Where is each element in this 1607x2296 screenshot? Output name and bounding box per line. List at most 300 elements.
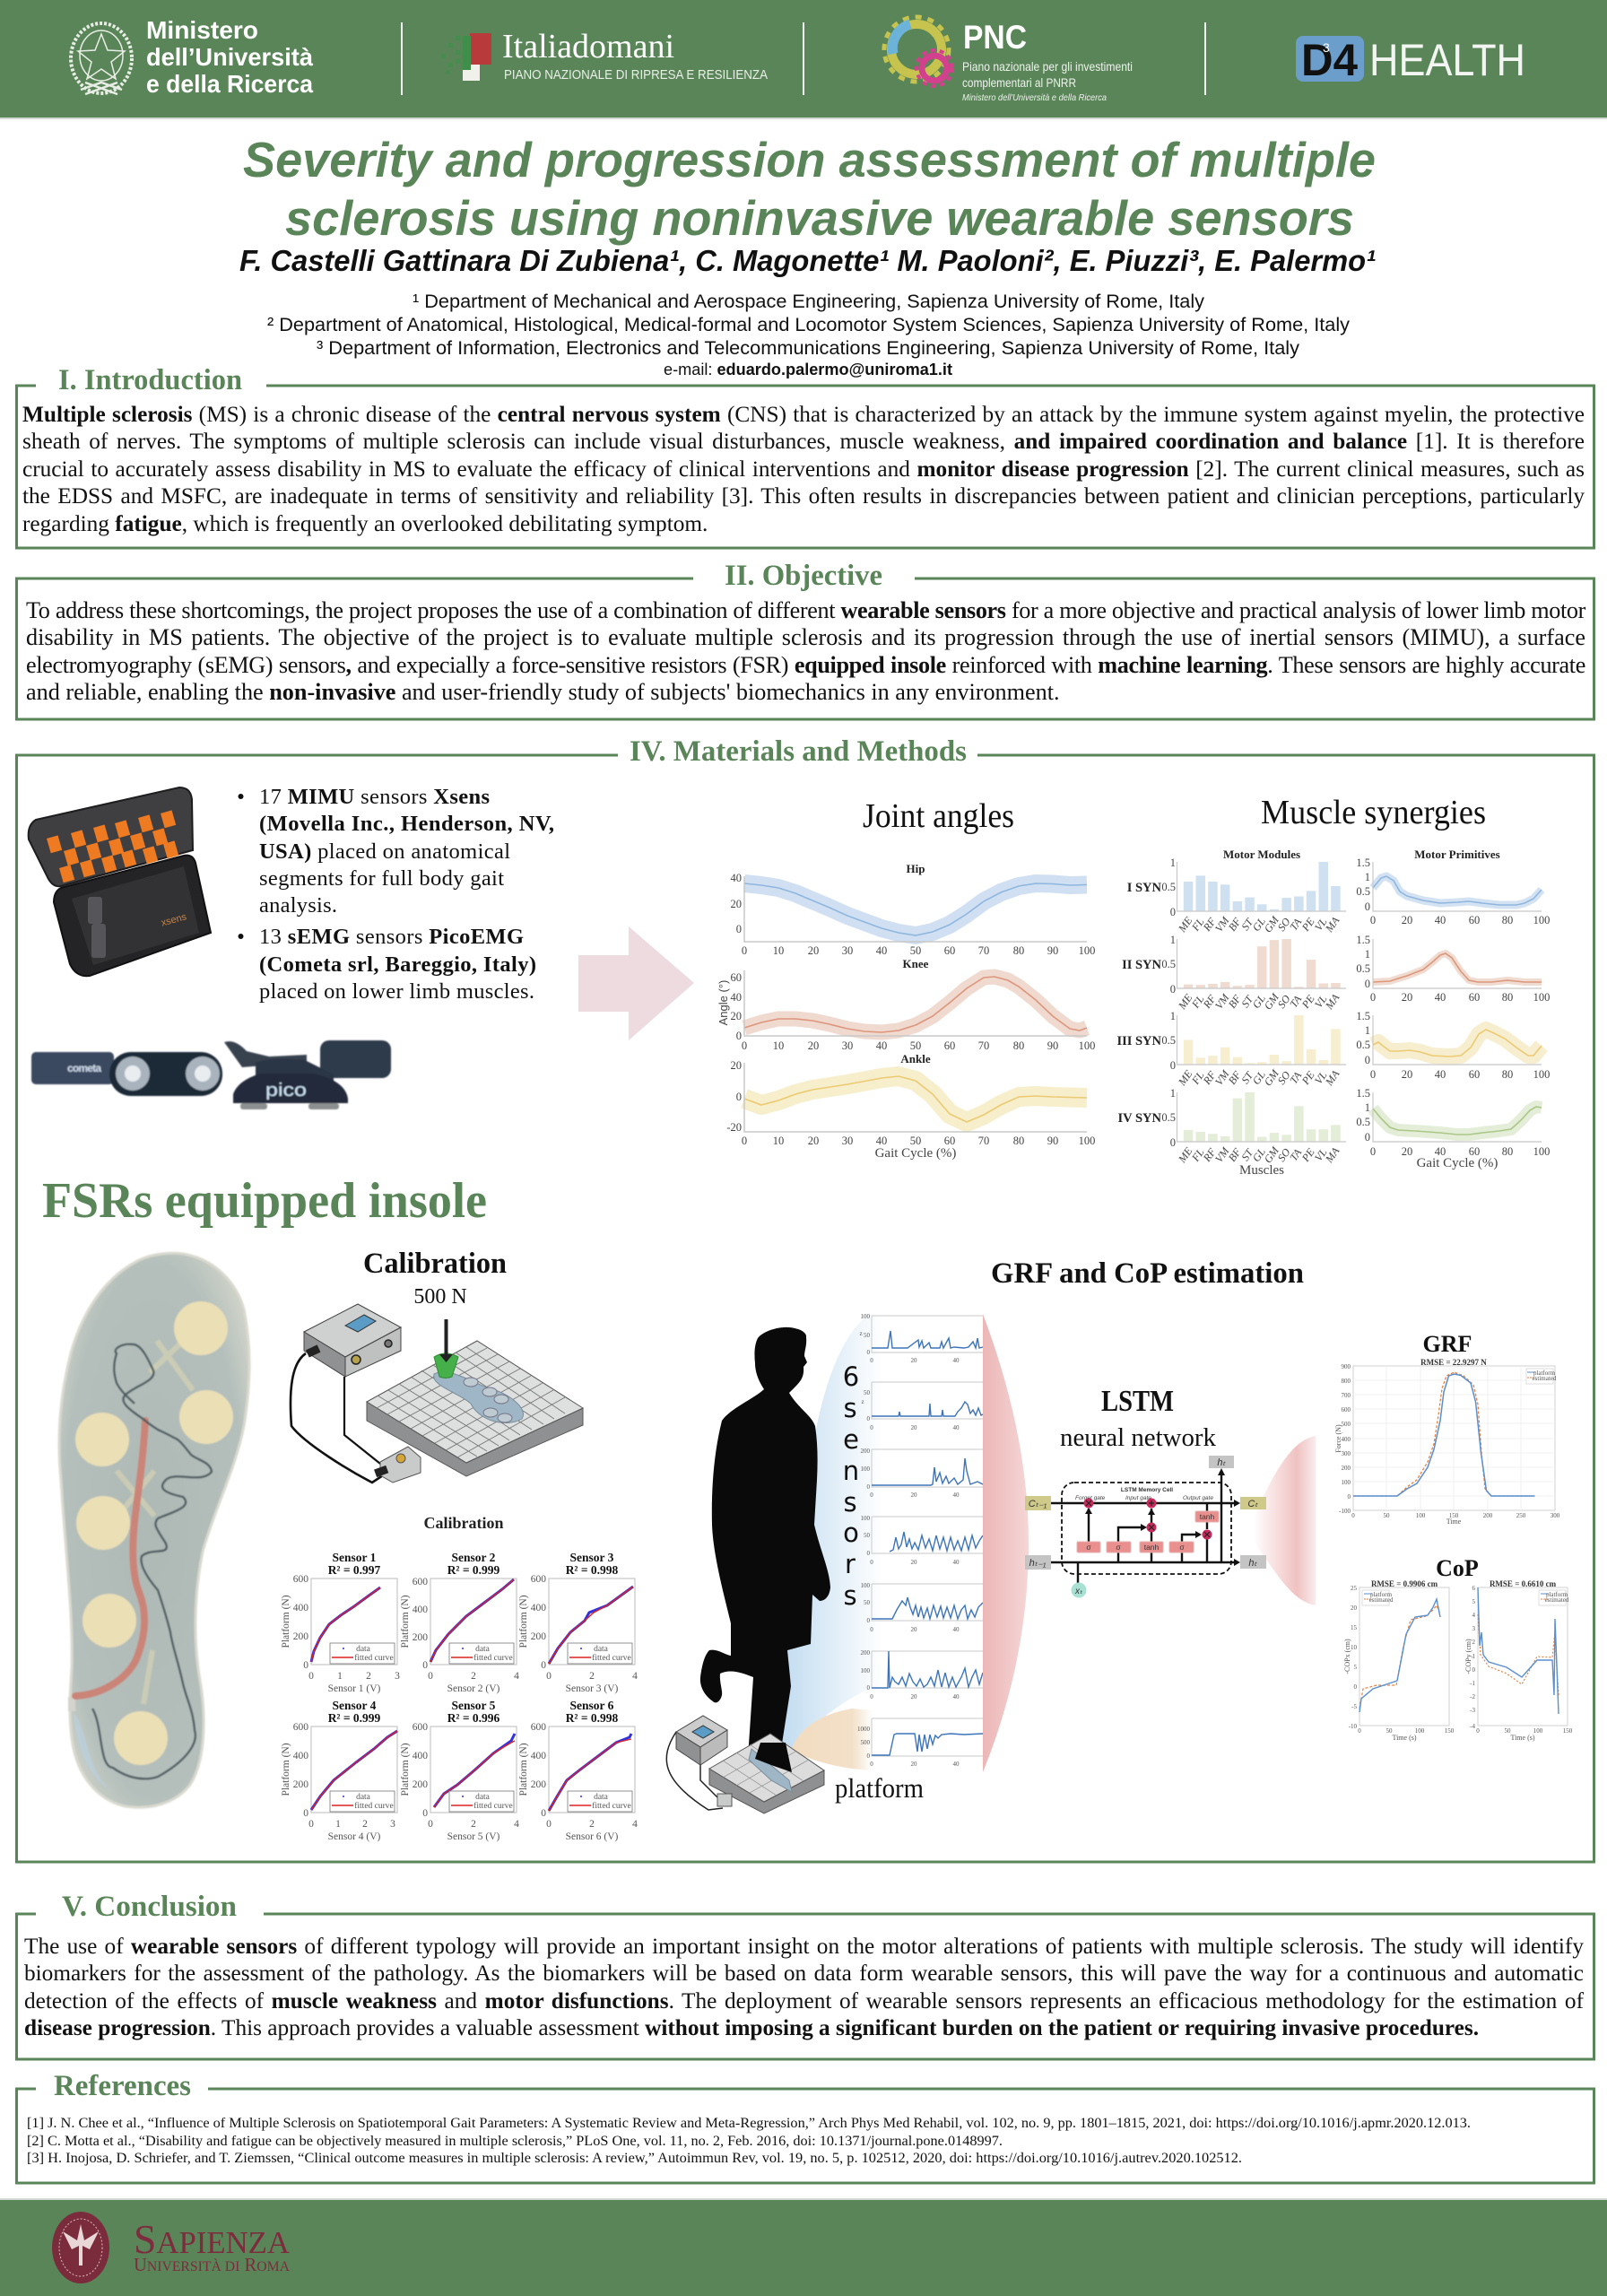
divider lines: [402, 22, 1205, 95]
heading: conclusion: V. Conclusion: [62, 1891, 237, 1923]
bars: synergy IV: 0.5: [1161, 1111, 1176, 1124]
plot: sensor 4: Sensor 4 (V): [328, 1831, 381, 1842]
line chart: ankle: 100: [1079, 1135, 1095, 1147]
icon: Italian Republic emblem: [71, 23, 132, 94]
bullet list: sensors: (Cometa srl, Bareggio, Italy): [259, 952, 536, 977]
curve: primitive IV: 0: [1370, 1145, 1376, 1158]
text: 6 sensors vertical: s: [843, 1487, 857, 1518]
curve: primitive IV: 20: [1402, 1145, 1412, 1158]
icon: Cometa picoEMG sensors: cometa: [67, 1062, 101, 1074]
plot: sensor 1: 3: [395, 1671, 400, 1682]
shape: output funnel: [1253, 1436, 1316, 1605]
plot: sensor 3: 0: [546, 1671, 552, 1682]
bars: synergy IV: [1118, 1087, 1346, 1166]
chart: GRF estimation: RMSE = 22.9297 N: [1420, 1358, 1487, 1367]
panel: materials and methods frame: [16, 735, 1594, 1862]
bars: synergy IV: TA: [1287, 1146, 1305, 1163]
chart: motor modules bars: [1116, 848, 1346, 1178]
signal 2: 0: [870, 1424, 873, 1431]
D4 Health logo: HEALTH: [1369, 35, 1525, 85]
text: 6 sensors vertical: s: [843, 1393, 857, 1423]
line chart: knee: 30: [842, 1039, 853, 1052]
curve: primitive III: 80: [1502, 1068, 1513, 1081]
shape: input funnel: [983, 1314, 1029, 1772]
curve: primitive IV: 0.5: [1356, 1116, 1370, 1128]
chart: CoP x: -5: [1351, 1703, 1357, 1710]
icon: Cometa picoEMG sensors: [31, 1040, 391, 1109]
bars: synergy II: SO: [1275, 992, 1293, 1011]
chart: CoP y: RMSE = 0.6610 cm: [1490, 1579, 1557, 1588]
bars: synergy IV: ME: [1175, 1144, 1195, 1166]
plot: sensor 4: 200: [293, 1779, 308, 1790]
chart: motor primitives curves: Gait Cycle (%): [1417, 1156, 1498, 1170]
bars: synergy III: GL: [1250, 1068, 1268, 1087]
bars: synergy III: ST: [1238, 1068, 1256, 1086]
line chart: knee: 70: [978, 1039, 989, 1052]
plot: sensor 1: 200: [293, 1631, 308, 1642]
plot: sensor 4: Platform (N): [281, 1743, 291, 1796]
chart: CoP y: -2: [1470, 1693, 1475, 1700]
chart: CoP y: -COPy (cm): [1464, 1639, 1472, 1674]
bars: synergy III: FL: [1188, 1069, 1207, 1087]
bars: synergy I: BF: [1226, 915, 1244, 934]
diagram: LSTM memory cell: tanh: [1144, 1543, 1160, 1552]
chart: CoP y: 4: [1472, 1612, 1476, 1619]
plot: sensor 6: 600: [531, 1722, 546, 1733]
signal 5: 50: [864, 1599, 870, 1606]
D4 Health logo: 3: [1323, 40, 1330, 55]
bars: synergy II: FL: [1188, 993, 1207, 1011]
line chart: hip: 20: [730, 898, 742, 910]
reference list: [2] C. Motta et al., “Disability and fatigue can be objectively measured in multiple sclerosis,” PLoS One, vol. 11, no. 2, Feb. 2016, doi: 10.1371/journal.pone.0148997.: [27, 2134, 1003, 2149]
bars: synergy I: ST: [1238, 915, 1256, 933]
bars: synergy II: GM: [1262, 990, 1281, 1012]
shape: blue sensor fan: [773, 1315, 883, 1760]
D4 Health logo: [1296, 35, 1525, 85]
signal 7: 1000: [857, 1726, 870, 1733]
PNC logotype: [962, 19, 1133, 103]
shape: platform fan: [791, 1709, 873, 1770]
bars: synergy III: MA: [1322, 1067, 1342, 1089]
label: neural network: neural network: [1060, 1423, 1216, 1452]
chart: CoP x: 20: [1351, 1605, 1358, 1612]
reference list: [3] H. Inojosa, D. Schriefer, and T. Ziemssen, “Clinical outcome measures in multiple sclerosis: A review,” Autoimmun Rev, vol. 19, no. 5, p. 102512, 2020, doi: https://doi.org/10.1016/j.autrev.2020.102512.: [27, 2151, 1242, 2166]
plot: sensor 5: Platform (N): [400, 1743, 411, 1796]
plot: sensor 1: fitted curve: [354, 1653, 394, 1663]
line chart: ankle: 30: [842, 1135, 853, 1147]
panel: objective frame: [16, 560, 1594, 719]
bars: synergy II: 0: [1170, 983, 1176, 996]
plot: sensor 6: 0: [541, 1808, 546, 1819]
signal 1: 50: [864, 1332, 870, 1339]
plot: sensor 3: Platform (N): [518, 1595, 529, 1648]
line chart: hip: 100: [1079, 944, 1095, 957]
bars: synergy III: SO: [1275, 1068, 1293, 1087]
diagram: LSTM memory cell: LSTM Memory Cell: [1121, 1487, 1173, 1493]
chart: GRF estimation: 150: [1449, 1512, 1459, 1519]
heading: FSRs equipped insole: FSRs equipped insole: [42, 1173, 487, 1229]
plot: sensor 2: Platform (N): [400, 1595, 411, 1648]
curve: primitive III: 1: [1365, 1024, 1370, 1037]
plot: sensor 4: 600: [293, 1722, 308, 1733]
chart: GRF estimation: 0: [1347, 1493, 1351, 1500]
signal 1: 0: [870, 1357, 873, 1364]
curve: primitive II: 0.5: [1356, 962, 1370, 975]
diagram: LSTM memory cell: σ: [1179, 1543, 1185, 1552]
line chart: knee: 90: [1047, 1039, 1058, 1052]
line chart: hip: 60: [944, 944, 955, 957]
bars: synergy II: VM: [1212, 991, 1232, 1012]
chart: motor primitives curves: Motor Primitives: [1414, 848, 1500, 861]
chart: GRF estimation: 600: [1342, 1406, 1351, 1413]
line chart: hip: 40: [730, 872, 742, 884]
text block: objective: disability in MS patients. The objective of the project is to evaluate multiple sclerosis and its progression through the use of inertial sensors (MIMU), a surface: [26, 624, 1585, 650]
chart: GRF estimation: 200: [1483, 1512, 1493, 1519]
heading: materials and methods: IV. Materials and Methods: [630, 735, 967, 768]
line chart: ankle: 90: [1047, 1135, 1058, 1147]
curve: primitive I: 1.5: [1356, 857, 1370, 869]
diagram: LSTM memory cell: Cₜ: [1247, 1499, 1258, 1509]
signal 3: 100: [861, 1465, 870, 1473]
chart: GRF estimation: 300: [1342, 1450, 1351, 1457]
line chart: hip: 0: [736, 923, 742, 935]
diagram: LSTM memory cell: tanh: [1200, 1512, 1215, 1521]
plot: sensor 5: R² = 0.996: [447, 1711, 500, 1725]
plot: sensor 3: [518, 1551, 638, 1694]
curve: primitive IV: 0: [1365, 1131, 1370, 1144]
bars: synergy III: TA: [1287, 1069, 1305, 1086]
heading: references: References: [54, 2070, 191, 2102]
line chart: ankle: 20: [730, 1059, 742, 1072]
curve: primitive III: 20: [1402, 1068, 1412, 1081]
heading: joint angles: Joint angles: [863, 797, 1014, 835]
plot: sensor 5: fitted curve: [473, 1801, 513, 1811]
chart: CoP x: RMSE = 0.9906 cm: [1371, 1579, 1438, 1588]
curve: primitive III: [1356, 1010, 1550, 1081]
diagram: LSTM memory cell: σ: [1116, 1543, 1121, 1552]
plot: sensor 6: R² = 0.998: [566, 1711, 619, 1725]
chart: GRF estimation: 50: [1383, 1512, 1390, 1519]
curve: primitive III: 0: [1370, 1068, 1376, 1081]
text block: objective: [26, 597, 1585, 705]
affiliations: e-mail: eduardo.palermo@uniroma1.it: [664, 361, 952, 378]
bars: synergy I: GM: [1262, 913, 1281, 935]
plot: sensor 6: 200: [531, 1779, 546, 1790]
plot: sensor 5: 2: [471, 1819, 476, 1830]
signal 1: 100: [861, 1313, 870, 1320]
curve: primitive I: [1356, 857, 1550, 926]
line chart: ankle: Ankle: [900, 1052, 931, 1065]
signal 2: 20: [911, 1424, 917, 1431]
line chart: knee: 100: [1079, 1039, 1095, 1052]
signal 7: 20: [911, 1761, 917, 1768]
chart: GRF estimation: [1334, 1358, 1560, 1526]
chart: CoP x: platform: [1370, 1591, 1393, 1598]
bars: synergy IV: GM: [1262, 1144, 1281, 1165]
line chart: ankle: 10: [773, 1135, 784, 1147]
chart: GRF estimation: 400: [1342, 1436, 1351, 1443]
plot: sensor 5: 4: [514, 1819, 519, 1830]
bars: synergy II: [1122, 934, 1346, 1013]
bars: synergy III: III SYN: [1116, 1034, 1162, 1048]
bars: synergy II: GL: [1250, 992, 1268, 1011]
signal 6: 0: [870, 1693, 873, 1700]
signal 6: 20: [911, 1693, 917, 1700]
chart: GRF estimation: -100: [1339, 1508, 1351, 1515]
chart: CoP x: 150: [1445, 1727, 1455, 1735]
plot: sensor 2: 0: [428, 1671, 433, 1682]
bullet list: sensors: [239, 785, 554, 1004]
plot: sensor 3: 0: [541, 1660, 546, 1671]
plot: sensor 1: 400: [293, 1603, 308, 1613]
chart: GRF estimation: 300: [1551, 1512, 1560, 1519]
Italiadomani logotype: Italiadomani: [502, 28, 674, 65]
chart: CoP y: 2: [1472, 1639, 1476, 1646]
plot: sensor 2: Sensor 2: [452, 1551, 496, 1564]
plot: sensor 2: 2: [471, 1671, 476, 1682]
signal 4: 100: [861, 1515, 870, 1522]
heading: GRF: GRF: [1423, 1331, 1472, 1357]
line chart: knee: 0: [742, 1039, 747, 1052]
line chart: knee: 0: [736, 1030, 742, 1042]
line chart: knee: 20: [730, 1010, 742, 1022]
diagram: LSTM memory cell: hₜ₋₁: [1029, 1558, 1047, 1569]
ministry name: e della Ricerca: [146, 70, 313, 98]
bars: synergy IV: PE: [1299, 1145, 1317, 1165]
signal 4: 40: [952, 1559, 960, 1566]
PNC logotype: complementari al PNRR: [962, 75, 1076, 90]
text: 6 sensors vertical: s: [843, 1580, 857, 1611]
signal 7: 0: [866, 1752, 870, 1760]
plot: sensor 1: 1: [337, 1671, 343, 1682]
signal 7: 500: [861, 1739, 870, 1746]
curve: primitive I: 0: [1365, 900, 1370, 913]
icon: PNC gears: [884, 17, 952, 86]
plot: sensor 5: Sensor 5: [452, 1699, 496, 1712]
curve: primitive II: 1.5: [1356, 934, 1370, 946]
diagram: LSTM memory cell: [1025, 1456, 1266, 1598]
signal 5: 0: [866, 1617, 870, 1624]
plot: sensor 4: data: [356, 1793, 371, 1802]
illustration: mini force platform: [666, 1716, 824, 1813]
text block: conclusion: The use of wearable sensors of different typology will provide an important insight on the motor alterations of patients with multiple sclerosis. The study will identify: [24, 1934, 1584, 1959]
panel: conclusion frame: [16, 1891, 1594, 2059]
line chart: hip: 20: [808, 944, 819, 957]
signal 2: 40: [952, 1424, 960, 1431]
plot: sensor 5: 200: [413, 1779, 428, 1790]
plot: sensor 2: 4: [514, 1671, 519, 1682]
text block: introduction: crucial to accurately assess disability in MS to evaluate the efficacy of clinical interventions and monitor disease progression [2]. The current clinical measures, such as: [22, 457, 1585, 482]
plot: sensor 6: 0: [546, 1819, 552, 1830]
plot: sensor 4: fitted curve: [354, 1801, 394, 1811]
chart: CoP y: 50: [1505, 1727, 1511, 1735]
bullet list: sensors: (Movella Inc., Henderson, NV,: [259, 812, 554, 836]
illustration: calibration rig: [291, 1304, 583, 1483]
plot: sensor 4: 400: [293, 1751, 308, 1761]
heading: CoP: CoP: [1436, 1555, 1479, 1581]
signal 3: 200: [861, 1448, 870, 1455]
curve: primitive III: 40: [1435, 1068, 1446, 1081]
icon: Italiadomani flag: [441, 33, 491, 81]
chart: CoP y: 6: [1472, 1585, 1476, 1592]
icon: Xsens sensor case: [29, 787, 211, 976]
plot: sensor 1: data: [356, 1645, 371, 1654]
bars: synergy III: GM: [1262, 1066, 1281, 1088]
plot: sensor 1: Sensor 1 (V): [328, 1683, 381, 1694]
signal 1: z: [859, 1330, 863, 1337]
text: 6 sensors vertical: 6: [843, 1361, 859, 1392]
icon: Xsens sensor case: xsens: [161, 911, 188, 928]
bars: synergy I: VM: [1212, 914, 1232, 935]
curve: primitive I: 20: [1402, 914, 1412, 926]
diagram: LSTM memory cell: xₜ: [1074, 1587, 1083, 1596]
plot: sensor 5: 0: [428, 1819, 433, 1830]
line chart: ankle: 20: [808, 1135, 819, 1147]
line chart: hip: 70: [978, 944, 989, 957]
plot: sensor 1: 600: [293, 1574, 308, 1585]
curve: primitive II: [1356, 934, 1550, 1004]
plot: sensor 1: Sensor 1: [333, 1551, 377, 1564]
text block: conclusion: [24, 1934, 1584, 2040]
bars: synergy III: PE: [1299, 1068, 1317, 1088]
plot: sensor 6: 400: [531, 1751, 546, 1761]
bars: synergy I: TA: [1287, 916, 1305, 933]
curve: primitive IV: 1: [1365, 1101, 1370, 1114]
text: 6 sensors vertical: r: [845, 1549, 856, 1579]
line chart: knee: 10: [773, 1039, 784, 1052]
header banner: [0, 0, 1607, 119]
signal 5: 40: [952, 1626, 960, 1633]
plot: sensor 2: 0: [422, 1660, 428, 1671]
bars: synergy II: MA: [1322, 991, 1342, 1013]
plot: sensor 6: Platform (N): [518, 1743, 529, 1796]
plot: sensor 4: 3: [390, 1819, 395, 1830]
bars: synergy II: BF: [1226, 992, 1244, 1011]
chart: CoP x: estimated: [1369, 1596, 1394, 1604]
bars: synergy II: 1: [1170, 934, 1176, 946]
ministry name: [146, 16, 313, 98]
line chart: ankle: 60: [944, 1135, 955, 1147]
chart: GRF estimation: 250: [1516, 1512, 1526, 1519]
chart: CoP y: -1: [1470, 1680, 1475, 1687]
plot: sensor 5: Sensor 5 (V): [447, 1831, 500, 1842]
bars: synergy IV: 1: [1170, 1087, 1176, 1100]
chart: CoP x: 15: [1351, 1624, 1358, 1631]
plot: sensor 3: 400: [531, 1603, 546, 1613]
chart: GRF estimation: 800: [1342, 1378, 1351, 1385]
heading: GRF and CoP estimation: GRF and CoP estimation: [991, 1257, 1304, 1290]
signal 7: 0: [870, 1761, 873, 1768]
chart: CoP y: 5: [1472, 1598, 1476, 1605]
bars: synergy IV: IV SYN: [1118, 1111, 1162, 1126]
panel: references frame: [16, 2070, 1594, 2183]
curve: primitive II: 1: [1365, 948, 1370, 961]
signal 4: 0: [870, 1559, 873, 1566]
plot: sensor 3: 200: [531, 1631, 546, 1642]
text block: conclusion: biomarkers for the assessment of the pathology. As the biomarkers will be based on data form wearable sensors, this will pave the way for a continuous and automatic: [24, 1961, 1584, 1986]
plot: sensor 2: data: [475, 1645, 491, 1654]
chart: CoP y: 3: [1472, 1625, 1476, 1632]
signal 3: 20: [911, 1492, 917, 1499]
chart: joint angles: [717, 862, 1095, 1161]
line chart: hip: 30: [842, 944, 853, 957]
illustration: person silhouette: [700, 1327, 830, 1770]
signal 6: 40: [952, 1693, 960, 1700]
bars: synergy IV: SO: [1275, 1145, 1293, 1164]
reference list: [27, 2116, 1471, 2166]
PNC logotype: PNC: [963, 19, 1027, 56]
bullet list: sensors: USA) placed on anatomical: [259, 839, 510, 864]
signal 4: 50: [864, 1532, 870, 1539]
signal 3: 40: [952, 1492, 960, 1499]
chart: CoP x: [1343, 1579, 1455, 1742]
panel: introduction frame: [16, 364, 1594, 548]
diagram: LSTM memory cell: σ: [1086, 1543, 1091, 1552]
ministry name: Ministero: [146, 16, 258, 44]
plot: sensor 1: 0: [303, 1660, 308, 1671]
plot: sensor 6: fitted curve: [592, 1801, 631, 1811]
cable: [291, 1353, 388, 1483]
plot: sensor 3: Sensor 3: [570, 1551, 614, 1564]
chart: CoP x: 0: [1358, 1727, 1361, 1735]
chart: GRF estimation: 100: [1416, 1512, 1426, 1519]
icon: Cometa picoEMG sensors: pico: [265, 1081, 307, 1100]
line chart: knee: 40: [730, 991, 742, 1004]
text block: introduction: Multiple sclerosis (MS) is a chronic disease of the central nervous system (CNS) that is characterized by an attack by the immune system against myelin, the protective: [22, 402, 1585, 427]
plot: sensor 5: 600: [413, 1722, 428, 1733]
bars: synergy I: 0.5: [1161, 881, 1176, 893]
curve: primitive IV: 40: [1435, 1145, 1446, 1158]
signal 4: 20: [911, 1559, 917, 1566]
text: 6 sensors vertical: [843, 1361, 859, 1611]
bars: synergy I: ME: [1175, 914, 1195, 935]
line chart: ankle: 80: [1013, 1135, 1024, 1147]
plot: sensor 4: 2: [362, 1819, 368, 1830]
bars: synergy III: 1: [1170, 1010, 1176, 1022]
bars: synergy IV: RF: [1200, 1145, 1219, 1165]
curve: primitive IV: 100: [1533, 1145, 1550, 1158]
plot: sensor 3: R² = 0.998: [566, 1563, 619, 1577]
chart group: seven sensor signals: [857, 1313, 983, 1768]
signal 1: 0: [866, 1349, 870, 1356]
text block: conclusion: disease progression. This approach provides a valuable assessment without imposing a significant burden on the patient or requiring invasive procedures.: [24, 2015, 1479, 2040]
signal 3: [861, 1448, 983, 1499]
text block: conclusion: detection of the effects of muscle weakness and motor disfunctions. The deployment of wearable sensors represents an efficacious methodology for the estimation of: [24, 1988, 1584, 2013]
heading: introduction: I. Introduction: [58, 364, 242, 396]
bars: synergy I: [1127, 857, 1346, 935]
plot: sensor 1: 2: [366, 1671, 371, 1682]
chart: GRF estimation: estimated: [1533, 1375, 1557, 1382]
bars: synergy I: FL: [1188, 916, 1207, 934]
D4 Health logo: D4: [1301, 35, 1358, 85]
affiliations: ¹ Department of Mechanical and Aerospace Engineering, Sapienza University of Rome, Italy: [413, 291, 1204, 312]
plot: sensor 6: 4: [632, 1819, 638, 1830]
bars: synergy II: ST: [1238, 992, 1256, 1010]
signal 6: 100: [861, 1667, 870, 1674]
plot: sensor 1: 0: [308, 1671, 314, 1682]
plot: sensor 3: 4: [632, 1671, 638, 1682]
ministry name: dell’Università: [146, 43, 313, 71]
bars: synergy IV: VL: [1312, 1146, 1330, 1163]
line chart: knee: 80: [1013, 1039, 1024, 1052]
curve: primitive II: 0: [1370, 991, 1376, 1004]
plot: sensor 4: 0: [308, 1819, 314, 1830]
signal 4: [861, 1515, 983, 1566]
chart: GRF estimation: Force (N): [1334, 1424, 1342, 1453]
line chart: hip: 50: [910, 944, 921, 957]
line chart: hip: 90: [1047, 944, 1058, 957]
plot: sensor 1: [281, 1551, 400, 1694]
